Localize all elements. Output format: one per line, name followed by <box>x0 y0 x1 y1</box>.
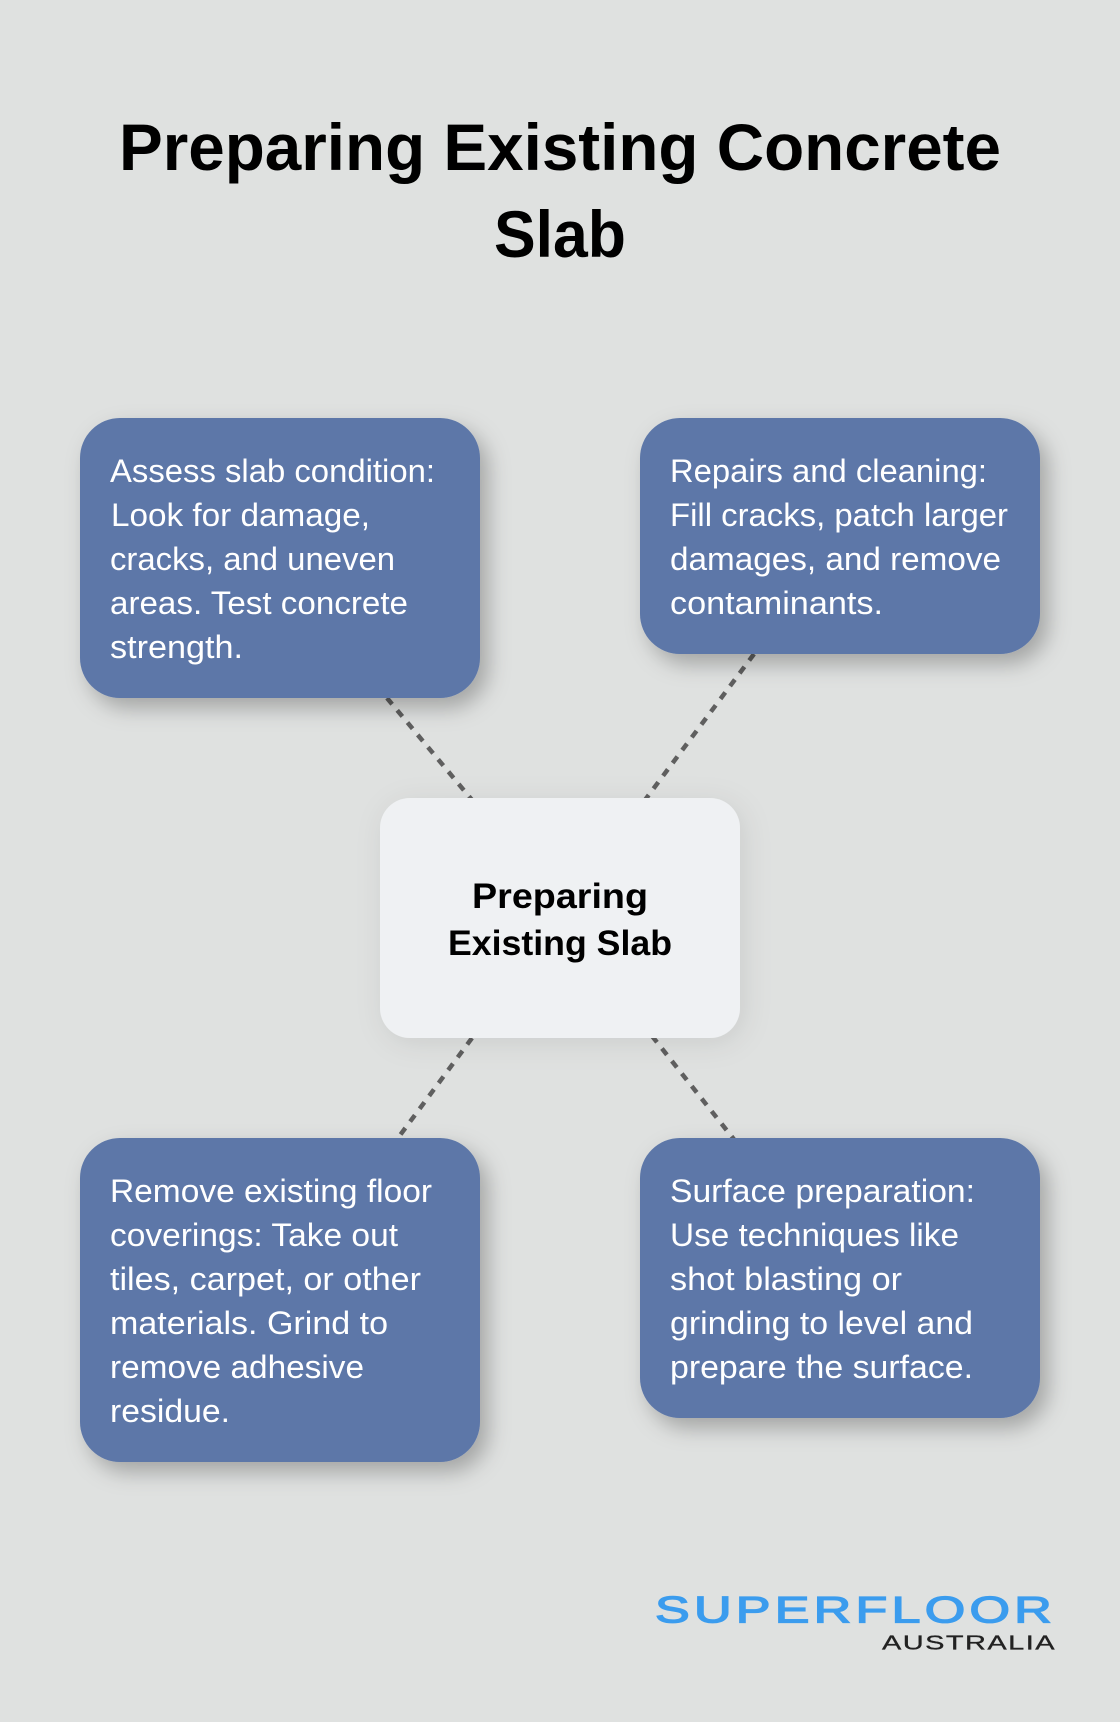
dashed connector: surface preparation to centre <box>652 1036 736 1142</box>
title: Slab <box>494 197 626 271</box>
panel: repairs and cleaning: Fill cracks, patch larger <box>670 497 1008 533</box>
panel: surface preparation: shot blasting or <box>670 1261 902 1297</box>
title: Preparing Existing Concrete <box>119 110 1001 184</box>
panel: centre topic <box>380 798 740 1038</box>
panel: repairs and cleaning <box>640 418 1040 654</box>
panel: assess slab condition: Look for damage, <box>111 497 370 533</box>
logo: Superfloor Australia: AUSTRALIA <box>882 1632 1056 1654</box>
panel: repairs and cleaning: Repairs and cleaning: <box>670 453 987 489</box>
panel: repairs and cleaning: contaminants. <box>670 585 883 621</box>
panel: repairs and cleaning: damages, and remove <box>670 541 1001 577</box>
panel: surface preparation: Surface preparation: <box>670 1173 975 1209</box>
logo: Superfloor Australia: SUPERFLOOR <box>655 1590 1056 1630</box>
panel: assess slab condition <box>80 418 480 698</box>
panel: surface preparation: grinding to level and <box>670 1305 973 1341</box>
panel: surface preparation: Use techniques like <box>670 1217 959 1253</box>
panel: assess slab condition: Assess slab condition: <box>110 453 435 489</box>
logo: Superfloor Australia <box>655 1590 1056 1654</box>
panel: assess slab condition: strength. <box>110 629 243 665</box>
panel: assess slab condition: areas. Test concrete <box>110 585 408 621</box>
panel: remove existing floor coverings: Remove existing floor <box>110 1173 432 1209</box>
panel: surface preparation <box>640 1138 1040 1418</box>
panel: remove existing floor coverings: coverings: Take out <box>110 1217 398 1253</box>
title <box>119 110 1001 271</box>
panel: remove existing floor coverings: tiles, carpet, or other <box>110 1261 421 1297</box>
panel: remove existing floor coverings <box>80 1138 480 1462</box>
panel: assess slab condition: cracks, and uneven <box>110 541 395 577</box>
panel: centre topic: Existing Slab <box>448 924 672 963</box>
dashed connector: floor coverings to centre <box>395 1038 472 1142</box>
dashed connector: repairs to centre <box>645 654 754 800</box>
panel: centre topic: Preparing <box>472 877 648 916</box>
panel: remove existing floor coverings: materials. Grind to <box>110 1305 388 1341</box>
panel: remove existing floor coverings: remove adhesive <box>110 1349 364 1385</box>
dashed connector: assess to centre <box>387 698 472 800</box>
panel: remove existing floor coverings: residue. <box>110 1393 230 1429</box>
panel: surface preparation: prepare the surface. <box>670 1349 973 1385</box>
